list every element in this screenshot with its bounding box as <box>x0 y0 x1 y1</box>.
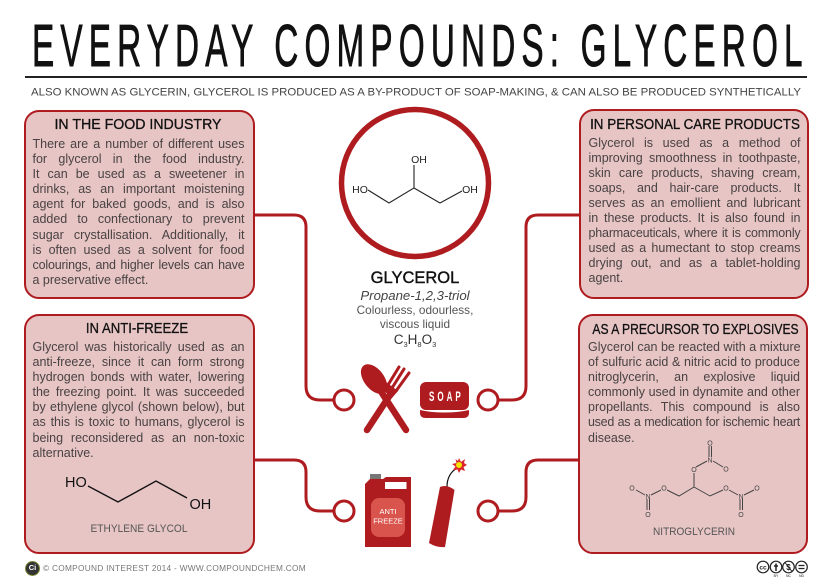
panel: anti-freeze <box>24 314 255 554</box>
text: anti-freeze: alternative. <box>32 446 94 460</box>
text: food industry: colourings, and higher levels can have <box>32 258 244 272</box>
ethylene glycol structure: ETHYLENE GLYCOL <box>90 523 188 535</box>
text: food industry: is often used as a solvent for food <box>32 243 244 257</box>
nitroglycerin structure: N <box>707 458 713 464</box>
heading: food industry: IN THE FOOD INDUSTRY <box>54 117 221 133</box>
text: anti-freeze: by ethylene glycol (shown below), but <box>32 400 244 414</box>
licence icons: NC <box>786 574 791 578</box>
heading: anti-freeze: IN ANTI-FREEZE <box>86 321 188 337</box>
text: food industry: added to confectionary to prevent <box>32 212 244 226</box>
text: anti-freeze: anti-freeze, since it can form strong <box>32 355 244 369</box>
text: food industry: agent for baked goods, and is also <box>32 197 244 211</box>
footer credit <box>25 561 306 576</box>
text: personal care: improving smoothness in toothpaste, <box>588 151 800 165</box>
text: anti-freeze: being reconsidered as an non-toxic <box>32 431 244 445</box>
nitroglycerin structure: O <box>629 486 635 492</box>
main compound circle: HO <box>352 184 368 196</box>
compound name and details: 8 <box>417 340 422 349</box>
text: anti-freeze: the freezing point. It was succeeded <box>32 385 244 399</box>
licence icons: BY <box>774 574 779 578</box>
panel: explosives <box>578 314 808 554</box>
text: personal care: used as a humectant to stop creams <box>588 241 800 255</box>
text: personal care: skin care products, shaving cream, <box>588 166 800 180</box>
text: personal care: agent. <box>588 271 623 285</box>
compound name and details: viscous liquid <box>380 317 450 331</box>
nitroglycerin structure: O <box>723 486 729 492</box>
nitroglycerin structure: O <box>707 440 713 448</box>
heading: explosives: AS A PRECURSOR TO EXPLOSIVES <box>592 322 799 338</box>
licence icons: cc <box>759 564 767 572</box>
compound name and details: 3 <box>432 340 436 349</box>
compound name and details: GLYCEROL <box>371 269 459 287</box>
nitroglycerin structure: O <box>723 466 729 474</box>
nitroglycerin structure: O <box>691 467 697 474</box>
licence icons: ND <box>799 574 804 578</box>
text: personal care <box>588 136 801 285</box>
nitroglycerin structure: N <box>645 494 651 501</box>
icon: anti-freeze jug: ANTI <box>379 507 397 516</box>
text: anti-freeze <box>32 340 244 460</box>
nitroglycerin structure: O <box>645 512 651 519</box>
compound name and details: C <box>394 332 403 347</box>
text: explosives: nitroglycerin, an explosive liquid <box>588 370 800 384</box>
text: food industry: There are a number of different uses <box>32 137 244 151</box>
text: personal care: in these products. It is also found in <box>588 211 800 225</box>
panel: personal care <box>578 109 808 299</box>
text: food industry: drinks, as an important moistening <box>32 182 244 196</box>
nitroglycerin structure: NITROGLYCERIN <box>653 526 735 538</box>
text: food industry: a preservative effect. <box>32 273 148 287</box>
icon: soap: SOAP <box>429 390 461 405</box>
text: food industry: It can be used as a sweetener in <box>32 167 244 181</box>
text: personal care: drying out, and as a tablet-holding <box>588 256 800 270</box>
icon: anti-freeze jug: FREEZE <box>373 516 403 526</box>
text: personal care: Glycerol is used as a method of <box>588 136 800 150</box>
footer text: © COMPOUND INTEREST 2014 - WWW.COMPOUNDCHEM.COM <box>43 563 306 573</box>
nitroglycerin structure: O <box>661 486 667 492</box>
text: personal care: serves as an emollient and lubricant <box>588 196 800 210</box>
ethylene glycol structure: HO <box>65 475 87 491</box>
text: food industry <box>32 137 244 287</box>
text: anti-freeze: Glycerol was historically used as an <box>32 340 244 354</box>
text: explosives <box>588 340 801 445</box>
text: food industry: sugar crystallisation. Additionally, it <box>32 228 244 242</box>
nitroglycerin structure: N <box>738 494 744 501</box>
text: explosives: commonly used in dynamite and other <box>588 385 800 399</box>
compound name and details: Propane-1,2,3-triol <box>360 288 471 303</box>
text: explosives: of sulfuric acid & nitric acid to produce <box>588 355 800 369</box>
icon: compound interest logo: Ci <box>29 562 36 572</box>
text: personal care: soaps, and hair-care products. It <box>588 181 800 195</box>
text: anti-freeze: as this is toxic to humans, glycerol is <box>32 415 244 429</box>
compound name and details: Colourless, odourless, <box>357 303 473 317</box>
main compound circle: OH <box>462 184 478 196</box>
text: explosives: Glycerol can be reacted with a mixture <box>588 340 801 354</box>
heading: personal care: IN PERSONAL CARE PRODUCTS <box>590 117 799 133</box>
subtitle: ALSO KNOWN AS GLYCERIN, GLYCEROL IS PRODUCED AS A BY-PRODUCT OF SOAP-MAKING, & CAN ALSO BE PRODUCED SYNTHETICALLY <box>31 86 801 98</box>
nitroglycerin structure: O <box>754 486 760 492</box>
text: explosives: used as a medication for ischemic heart <box>588 415 800 429</box>
compound name and details: O <box>422 332 432 347</box>
panel: food industry <box>24 110 255 299</box>
title rule <box>25 76 807 78</box>
text: explosives: propellants. This compound is also <box>588 400 800 414</box>
text: food industry: for glycerol in the food industry. <box>32 152 244 166</box>
nitroglycerin structure: O <box>738 512 744 519</box>
compound name and details: 3 <box>403 340 408 349</box>
licence icons: $ <box>786 563 791 572</box>
icon: compound interest logo <box>25 560 40 576</box>
main compound circle: OH <box>411 154 427 166</box>
text: explosives: disease. <box>588 431 635 445</box>
compound name and details: H <box>408 332 417 347</box>
text: anti-freeze: hydrogen bonds with water, lowering <box>32 370 244 384</box>
ethylene glycol structure: OH <box>190 497 211 513</box>
text: personal care: pharmaceuticals, where it is commonly <box>588 226 800 240</box>
